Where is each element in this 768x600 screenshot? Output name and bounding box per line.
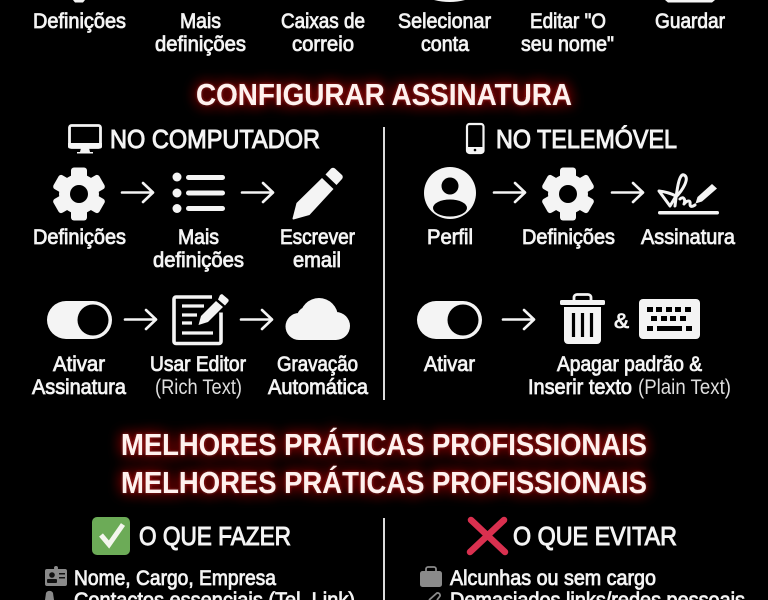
label: Gravação Automática: [268, 353, 368, 399]
divider: [383, 518, 385, 600]
label: Mais definições: definições: [155, 33, 246, 56]
icon: check mark: [92, 517, 130, 555]
label: Usar Editor (Rich Text): [150, 353, 246, 399]
panel: o que fazer: [45, 517, 355, 600]
label: Mais definições: [155, 10, 246, 56]
heading: melhores práticas profissionais: MELHORES PRÁTICAS PROFISSIONAIS: [121, 465, 647, 500]
text: alcunhas ou sem cargo: Alcunhas ou sem cargo: [450, 567, 656, 590]
panel: top steps: [33, 0, 725, 56]
icon: gear: [52, 168, 106, 220]
panel: o que evitar: [420, 520, 745, 600]
label: Assinatura: Assinatura: [641, 226, 735, 249]
heading: melhores práticas profissionais: MELHORES PRÁTICAS PROFISSIONAIS: [121, 427, 647, 462]
label: Gravação Automática: Automática: [268, 376, 368, 399]
icon: keyboard: [639, 299, 700, 339]
icon: profile: [424, 167, 476, 219]
icon: cropped top icons: [73, 0, 715, 2]
arrow: [125, 310, 156, 329]
icon: toggle: [417, 301, 482, 339]
arrow: [503, 310, 534, 329]
heading: o que evitar: O QUE EVITAR: [513, 521, 677, 551]
icon: gear: [541, 168, 595, 220]
arrow: [122, 183, 153, 202]
icon: editor: [174, 294, 229, 344]
label: Caixas de correio: correio: [292, 33, 354, 56]
text: nome, cargo, empresa: Nome, Cargo, Empresa: [74, 567, 276, 590]
label: Escrever email: Escrever: [280, 226, 355, 249]
label: Ativar: Ativar: [424, 353, 475, 376]
label: Apagar padrão e inserir texto: [528, 353, 731, 399]
heading: o que fazer: O QUE FAZER: [139, 521, 291, 551]
arrow: [241, 310, 272, 329]
heading: no computador: NO COMPUTADOR: [110, 124, 320, 154]
label: Mais definições: Mais: [180, 10, 221, 33]
label: Guardar: Guardar: [655, 10, 725, 33]
icon: list: [172, 172, 225, 213]
label: Usar Editor (Rich Text): Usar Editor: [150, 353, 246, 376]
icon: briefcase: [420, 567, 442, 587]
label: Escrever email: [280, 226, 355, 272]
icon: signature: [658, 175, 719, 214]
label: Selecionar conta: Selecionar: [398, 10, 491, 33]
label: Mais definições: Mais: [178, 226, 219, 249]
label: Ativar Assinatura: Ativar: [53, 353, 105, 376]
divider: [383, 127, 385, 400]
label: Mais definições: definições: [153, 249, 244, 272]
label: Caixas de correio: Caixas de: [281, 10, 365, 33]
label: Caixas de correio: [281, 10, 365, 56]
arrow: [494, 183, 525, 202]
panel: no telemóvel: [417, 124, 735, 399]
label: Apagar padrão e inserir texto: Apagar padrão &: [557, 353, 702, 376]
icon: phone grey: [45, 591, 54, 600]
icon: cross: [470, 520, 505, 552]
icon: cloud: [286, 298, 350, 340]
icon: monitor: [68, 126, 102, 154]
icon: id card: [45, 566, 67, 586]
icon: phone: [467, 124, 484, 153]
label: Escrever email: email: [293, 249, 341, 272]
label: Apagar padrão e inserir texto: (Plain Text): [638, 376, 731, 399]
label: Editar "O" seu nome: [521, 10, 614, 56]
icon: pencil: [292, 168, 343, 220]
label: Ativar Assinatura: [32, 353, 126, 399]
label: Definições: Definições: [33, 10, 126, 33]
panel: no computador: [32, 124, 368, 399]
label: Selecionar conta: conta: [421, 33, 469, 56]
label: Definições: Definições: [522, 226, 615, 249]
label: Perfil: Perfil: [427, 226, 473, 249]
label: Apagar padrão e inserir texto: Inserir texto: [528, 376, 632, 399]
text: ampersand: &: [614, 310, 629, 333]
label: Gravação Automática: Gravação: [277, 353, 358, 376]
label: Ativar Assinatura: Assinatura: [32, 376, 126, 399]
arrow: [612, 183, 643, 202]
label: Mais definições: [153, 226, 244, 272]
label: Editar "O" seu nome: seu nome": [521, 33, 614, 56]
icon: trash: [560, 294, 605, 344]
icon: toggle: [47, 301, 112, 339]
label: Usar Editor (Rich Text): (Rich Text): [155, 376, 242, 399]
heading: configurar assinatura: CONFIGURAR ASSINATURA: [196, 77, 572, 112]
heading: no telemóvel: NO TELEMÓVEL: [496, 124, 677, 154]
arrow: [242, 183, 273, 202]
icon: paperclip: [429, 593, 440, 600]
heading: melhores práticas profissionais: [121, 427, 647, 500]
label: Definições: Definições: [33, 226, 126, 249]
label: Selecionar conta: [398, 10, 491, 56]
label: Editar "O" seu nome: Editar "O: [530, 10, 606, 33]
